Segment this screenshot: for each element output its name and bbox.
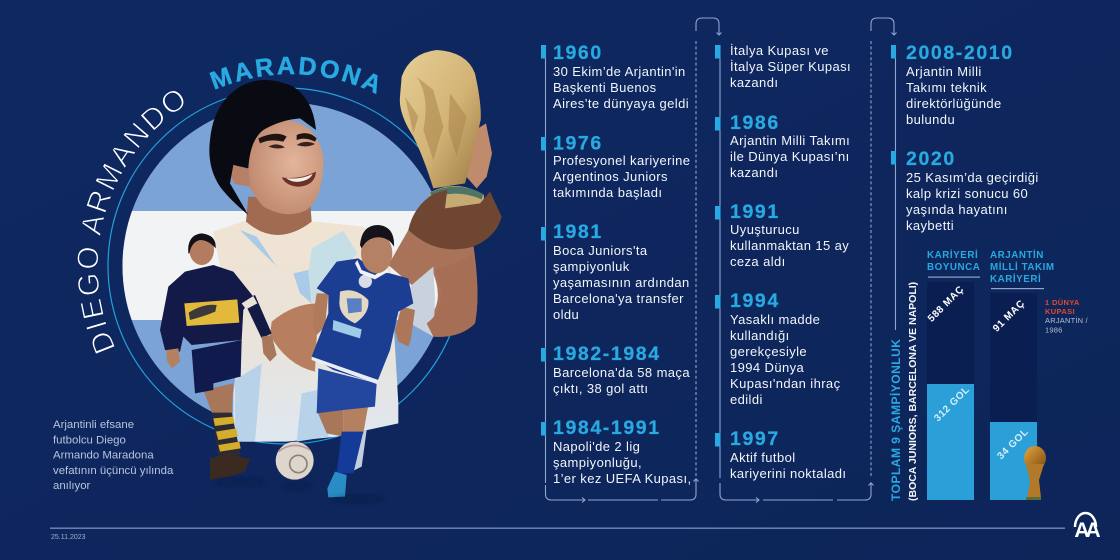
entry: 2008-2010: bulundu (906, 112, 955, 127)
entry: 1976: takımında başladı (553, 185, 662, 200)
entry: 2020: kaybetti (906, 218, 954, 233)
entry: 2020: 25 Kasım’da geçirdiği (906, 170, 1039, 185)
note: one World Cup: 1 DÜNYA (1045, 298, 1080, 307)
bar: national team matches: 91 MAÇ (991, 298, 1027, 334)
panel: portrait illustration (108, 50, 502, 500)
icon: AA logo: AA (1074, 519, 1100, 542)
entry: 1984-1991: 1984-1991 (553, 417, 661, 439)
entry: 1960: 30 Ekim’de Arjantin'in (553, 64, 686, 79)
caption text: vefatının üçüncü yılında (53, 465, 174, 477)
ball (276, 442, 314, 480)
entry: 1976: Argentinos Juniors (553, 169, 668, 184)
entry: 2020: 2020 (906, 148, 956, 170)
year markers (541, 45, 546, 436)
entry: 1994: Kupası'ndan ihraç (730, 376, 841, 391)
entry: 1982-1984 (553, 343, 690, 396)
hand holding the trophy (408, 189, 502, 249)
vertical heading: total titles (888, 282, 919, 501)
arms (313, 293, 328, 335)
bar heading: career: KARİYERİ (927, 250, 978, 261)
entry: 1991 (730, 201, 849, 269)
panel: timeline column 2 (715, 18, 896, 502)
entry: 1984-1991: Napoli'de 2 lig (553, 439, 640, 454)
face (245, 120, 323, 214)
date: 25.11.2023 (51, 534, 86, 541)
bar heading: career: BOYUNCA (927, 262, 980, 273)
title: DIEGO ARMANDO: DIEGO ARMANDO (78, 91, 184, 354)
entry: 1984-1991: şampiyonluğu, (553, 455, 642, 470)
bar: career goals (927, 384, 974, 500)
entry: 1984-1991: 1’er kez UEFA Kupası, (553, 471, 691, 486)
legs (203, 383, 233, 417)
clubs: (BOCA JUNIORS, BARCELONA VE NAPOLI) (907, 282, 919, 501)
entry: 1960: 1960 (553, 42, 603, 64)
entry: cups: İtalya Süper Kupası (730, 59, 851, 74)
entry: 2020: kalp krizi sonucu 60 (906, 186, 1028, 201)
fingers behind the trophy (463, 123, 492, 188)
caption text: futbolcu Diego (53, 434, 126, 446)
panel: timeline column 3 (891, 42, 1039, 330)
entry: cups: kazandı (730, 75, 778, 90)
entry: cups: İtalya Kupası ve (730, 43, 829, 58)
entry: 1984-1991 (553, 417, 691, 486)
head (189, 235, 214, 265)
entry: 1976 (553, 132, 690, 200)
caption text: Arjantinli efsane (53, 419, 134, 431)
entry: 1960: Başkenti Buenos (553, 80, 657, 95)
panel: timeline column 1 (541, 18, 722, 502)
bar heading: career (927, 250, 980, 278)
entry: 1986 (730, 112, 850, 180)
entry: 1981: Boca Juniors'ta (553, 243, 648, 258)
title: MARADONA: MARADONA (210, 56, 378, 94)
bar: national team goals: 34 GOL (995, 426, 1031, 462)
timeline connectors (720, 18, 896, 502)
bar heading: national team: KARİYERİ (990, 274, 1041, 285)
entry: 2020 (906, 148, 1039, 233)
entry: 1991: 1991 (730, 201, 780, 223)
entry: 2008-2010 (906, 42, 1014, 127)
entry: 1981 (553, 221, 690, 322)
entry: 1991: Uyuşturucu (730, 222, 800, 237)
entry: 2008-2010: 2008-2010 (906, 42, 1014, 64)
entry: 1981: yaşamasının ardından (553, 275, 690, 290)
entry: 1976: 1976 (553, 132, 603, 154)
arm band and forearm (243, 295, 272, 338)
entry: 1981: şampiyonluk (553, 259, 630, 274)
timeline connectors (546, 18, 722, 502)
year markers (715, 45, 720, 446)
other arm (270, 303, 318, 372)
hair (209, 80, 316, 215)
entry: 1997: 1997 (730, 428, 780, 450)
timeline line and markers (891, 45, 896, 330)
caption text: anılıyor (53, 480, 91, 492)
entry: 2008-2010: Arjantin Milli (906, 64, 982, 79)
entry: 1982-1984: Barcelona'da 58 maça (553, 365, 690, 380)
front leg (343, 405, 368, 433)
icon: small gold trophy (1024, 446, 1046, 500)
entry: 1960: Aires’te dünyaya geldi (553, 96, 689, 111)
caption text: Armando Maradona (53, 450, 154, 462)
note: one World Cup: 1986 (1045, 326, 1062, 334)
entry: 2008-2010: direktörlüğünde (906, 96, 1002, 111)
title: name on an arc (78, 56, 378, 354)
shirt (213, 220, 398, 442)
entry: 1994: edildi (730, 392, 763, 407)
entry: 1986: ile Dünya Kupası’nı (730, 149, 850, 164)
bar: career matches (926, 282, 974, 384)
entry: 1960 (553, 42, 689, 111)
bar: career matches: 588 MAÇ (926, 284, 967, 325)
footer line (50, 528, 1065, 529)
back leg (317, 410, 343, 437)
player in blue kit (312, 225, 415, 497)
entry: 1986: kazandı (730, 165, 778, 180)
shorts (192, 340, 242, 393)
entry: 1981: Barcelona'ya transfer (553, 291, 684, 306)
entry: 1994: 1994 (730, 290, 780, 312)
ring around the flag (108, 88, 464, 444)
entry: 1994 (730, 290, 841, 407)
entry: 1991: ceza aldı (730, 254, 786, 269)
note: one World Cup: ARJANTİN / (1045, 316, 1089, 325)
trophy (400, 50, 481, 188)
ground shadows (214, 480, 384, 500)
eyebrows, eyes and smile (258, 133, 317, 143)
main photo: Maradona lifting the trophy (209, 50, 502, 442)
bar heading: national team: MİLLİ TAKIM (990, 262, 1055, 273)
bar heading: national team: ARJANTİN (990, 250, 1044, 261)
entry: 1994: gerekçesiyle (730, 344, 807, 359)
entry: 1997: Aktif futbol (730, 450, 796, 465)
entry: 2008-2010: Takımı teknik (906, 80, 987, 95)
boots (210, 453, 250, 480)
entry: 1986: 1986 (730, 112, 780, 134)
entry: 1991: kullanmaktan 15 ay (730, 238, 849, 253)
entry: 1997 (730, 428, 846, 481)
entry: 1986: Arjantin Milli Takımı (730, 133, 850, 148)
entry: 1976: Profesyonel kariyerine (553, 153, 690, 168)
jersey (312, 258, 413, 383)
head (361, 233, 392, 273)
entry: 1997: kariyerini noktaladı (730, 466, 846, 481)
entry: 1994: Yasaklı madde (730, 312, 820, 327)
entry: 1982-1984: 1982-1984 (553, 343, 661, 365)
note: one World Cup: KUPASI (1045, 307, 1075, 316)
entry: 1982-1984: çıktı, 38 gol attı (553, 381, 648, 396)
jersey (160, 265, 253, 352)
bar: national team matches (990, 293, 1037, 422)
bar chart: career matches and goals (926, 250, 1089, 500)
total championships: TOPLAM 9 ŞAMPİYONLUK (888, 339, 903, 501)
raised arm (388, 230, 477, 337)
icon: AA logo (1074, 513, 1100, 542)
entry: 2020: yaşında hayatını (906, 202, 1008, 217)
bar: national team goals (990, 422, 1037, 500)
entry: 1994: 1994 Dünya (730, 360, 804, 375)
bar: career goals: 312 GOL (932, 384, 972, 424)
entry: 1994: kullandığı (730, 328, 790, 343)
entry: 1981: oldu (553, 307, 579, 322)
flag of Argentina circle (122, 104, 438, 417)
bar heading: national team (990, 250, 1055, 289)
Boca Juniors player (160, 233, 277, 480)
boot (327, 472, 347, 497)
note: one World Cup (1045, 298, 1089, 334)
entry: 1981: 1981 (553, 221, 603, 243)
neck (246, 197, 312, 235)
shorts (317, 368, 377, 413)
